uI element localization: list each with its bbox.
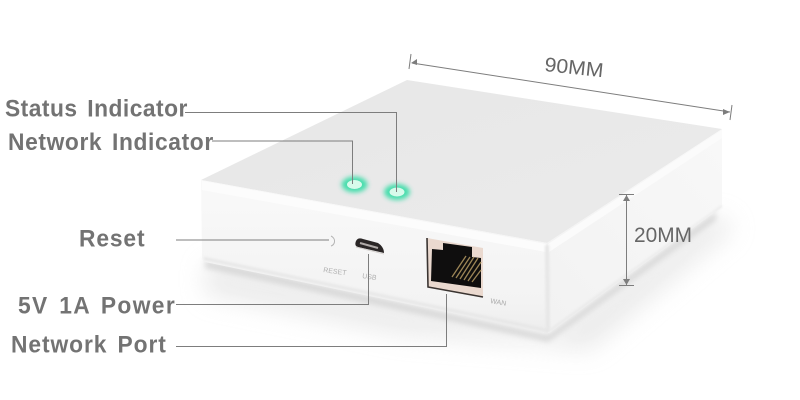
device shadow xyxy=(205,214,735,350)
contact shadow xyxy=(205,212,716,342)
label: Reset: Reset xyxy=(79,225,145,252)
icon: reset pinhole xyxy=(331,236,335,246)
top face xyxy=(201,80,722,243)
leader line: network port xyxy=(176,294,446,346)
top right bevel highlight xyxy=(548,130,722,252)
lower edge shading xyxy=(204,257,548,332)
leader line: network indicator xyxy=(212,141,352,184)
right side face xyxy=(547,129,722,333)
corner shading xyxy=(545,245,550,332)
device: white router box xyxy=(201,80,722,333)
dimension arrow: height 20MM xyxy=(619,194,634,286)
icon: network indicator LED xyxy=(342,176,368,192)
top front bevel highlight xyxy=(202,181,546,252)
icon: status indicator LED xyxy=(384,184,410,200)
label: Network Indicator: Network Indicator xyxy=(8,128,213,155)
WAN port label: WAN xyxy=(490,298,507,308)
dimension label: 20MM: 20MM xyxy=(634,224,692,247)
leader line: power xyxy=(176,254,368,304)
leader line: reset xyxy=(176,239,329,241)
label: RESET silkscreen: RESET xyxy=(323,267,348,277)
label: Network Port: Network Port xyxy=(11,331,166,358)
front face xyxy=(201,180,548,333)
label: USB silkscreen: USB xyxy=(362,273,377,282)
icon: micro USB port xyxy=(355,238,384,254)
leader line: status indicator xyxy=(185,112,396,192)
dimension label: 90MM: 90MM xyxy=(543,54,604,82)
icon: ethernet port xyxy=(427,238,507,308)
label: 5V 1A Power: 5V 1A Power xyxy=(18,292,175,319)
dimension arrow: width 90MM xyxy=(409,54,732,120)
label: Status Indicator: Status Indicator xyxy=(5,95,187,122)
